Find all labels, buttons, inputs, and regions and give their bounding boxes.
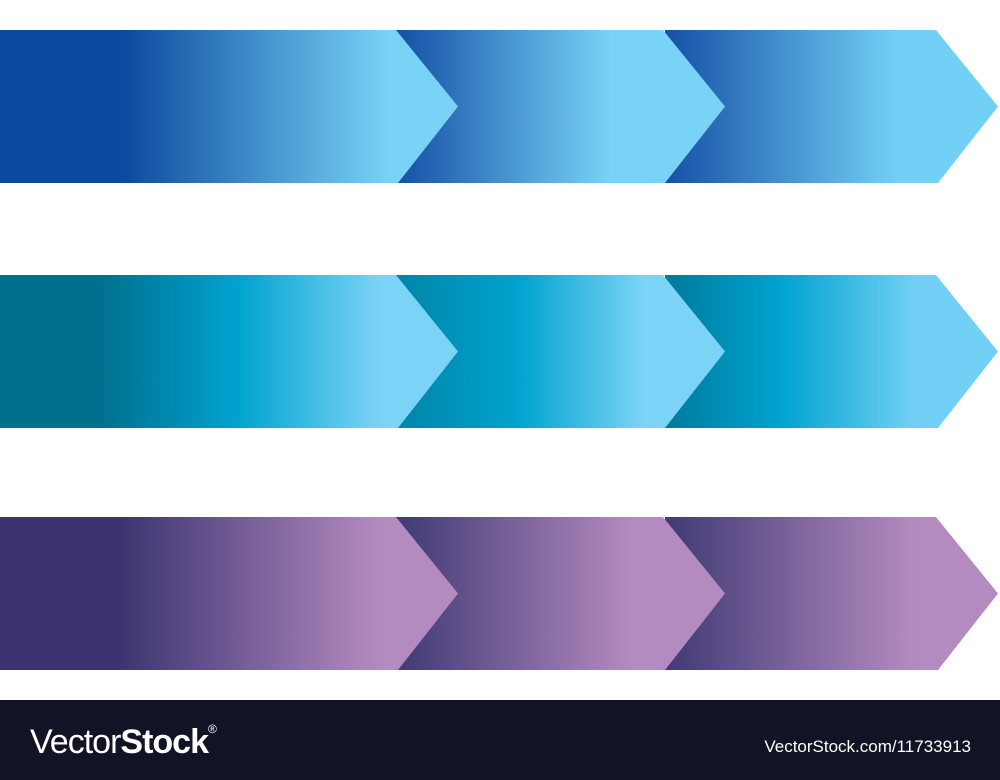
footer id: VectorStock.com/11733913 <box>764 737 971 756</box>
footer bar <box>0 700 1000 780</box>
footer logo: ® <box>208 722 217 736</box>
row 3: purple arrows <box>0 517 998 670</box>
row 1: blue arrows <box>0 30 998 183</box>
row 2: teal arrows <box>0 275 998 428</box>
footer logo: VectorStock <box>30 723 208 761</box>
